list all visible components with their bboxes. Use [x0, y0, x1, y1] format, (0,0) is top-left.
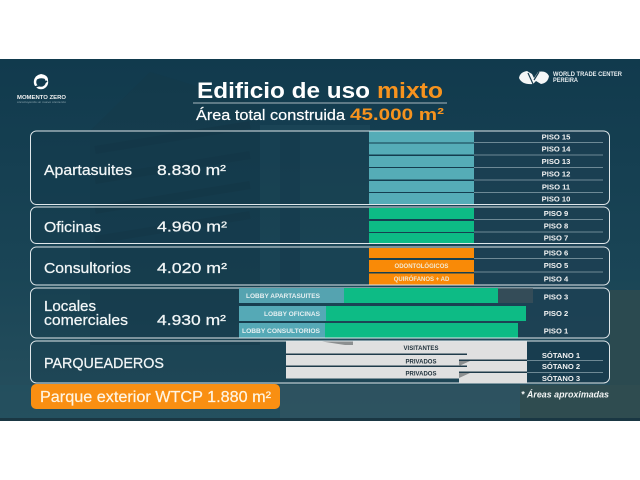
- panel: Locales comerciales: LOBBY OFICINAS: [264, 311, 321, 318]
- panel: Consultorios: PISO 4: [544, 274, 569, 284]
- panel: Apartasuites: PISO 12: [542, 170, 570, 178]
- panel: Consultorios: Consultorios: [44, 261, 131, 277]
- panel: Apartasuites: PISO 13: [542, 157, 570, 166]
- subtitle: total area: Área total construida: [196, 107, 346, 124]
- panel: Apartasuites: [30, 131, 610, 204]
- logo: Momento Zero: MOMENTO ZERO: [17, 95, 66, 101]
- panel: Parqueaderos: VISITANTES: [404, 346, 438, 352]
- subtitle: total area: 45.000 m²: [350, 105, 444, 124]
- panel: Locales comerciales: PISO 1: [544, 326, 569, 336]
- panel: Locales comerciales: [30, 288, 610, 338]
- logo: World Trade Center Pereira: [519, 71, 622, 84]
- panel: Oficinas: [30, 207, 610, 244]
- panel: Apartasuites: PISO 11: [542, 182, 571, 192]
- panel: Consultorios: QUIRÓFANOS + AD: [394, 275, 450, 283]
- panel: Consultorios: ODONTOLÓGICOS: [395, 262, 448, 270]
- panel: Oficinas: PISO 8: [544, 222, 568, 230]
- panel: Oficinas: 4.960 m²: [157, 220, 227, 236]
- panel: Consultorios: [30, 247, 610, 285]
- callout: Parque exterior: [31, 384, 280, 409]
- subtitle: total area: [196, 105, 444, 124]
- panel: Consultorios: PISO 5: [544, 261, 569, 270]
- panel: Locales comerciales: 4.930 m²: [157, 313, 226, 329]
- title: Edificio de uso: [197, 78, 370, 103]
- background: building photo: [0, 59, 640, 421]
- panel: Parqueaderos: PARQUEADEROS: [44, 356, 164, 372]
- title: [193, 78, 447, 104]
- panel: Locales comerciales: PISO 3: [544, 292, 568, 302]
- panel: Locales comerciales: PISO 2: [544, 309, 568, 318]
- panel: Parqueaderos: PRIVADOS: [406, 372, 436, 378]
- logo: World Trade Center Pereira: PEREIRA: [553, 77, 578, 84]
- panel: Apartasuites: PISO 10: [542, 194, 570, 204]
- panel: Parqueaderos: SÓTANO 2: [542, 362, 580, 371]
- panel: Parqueaderos: SÓTANO 3: [542, 374, 580, 383]
- panel: Locales comerciales: LOBBY CONSULTORIOS: [242, 328, 321, 335]
- panel: Locales comerciales: LOBBY APARTASUITES: [246, 293, 321, 300]
- panel: Consultorios: 4.020 m²: [157, 261, 227, 277]
- panel: Apartasuites: PISO 14: [542, 144, 571, 154]
- panel: Apartasuites: PISO 15: [542, 132, 571, 142]
- panel: Apartasuites: Apartasuites: [44, 163, 132, 179]
- logo: Momento Zero: construyendo un nuevo comienzo: [17, 100, 67, 104]
- right floor column shade: [474, 131, 609, 383]
- logo: Momento Zero: [17, 74, 67, 104]
- panel: Parqueaderos: [30, 341, 610, 383]
- panel: Locales comerciales: comerciales: [44, 313, 128, 329]
- panel: Consultorios: PISO 6: [544, 248, 568, 258]
- panel: Apartasuites: 8.830 m²: [157, 163, 226, 179]
- panel: Parqueaderos: SÓTANO 1: [542, 351, 581, 360]
- panel: Oficinas: Oficinas: [44, 220, 101, 236]
- panel: Oficinas: PISO 9: [544, 209, 568, 218]
- title: mixto: [377, 78, 443, 103]
- panel: Parqueaderos: PRIVADOS: [406, 360, 436, 366]
- panel: Oficinas: PISO 7: [544, 234, 568, 242]
- note: approximate areas: * Áreas aproximadas: [521, 390, 609, 400]
- panel: Locales comerciales: Locales: [44, 299, 96, 315]
- callout: Parque exterior: Parque exterior WTCP 1.880 m²: [40, 389, 271, 406]
- logo: World Trade Center Pereira: WORLD TRADE CENTER: [553, 71, 622, 78]
